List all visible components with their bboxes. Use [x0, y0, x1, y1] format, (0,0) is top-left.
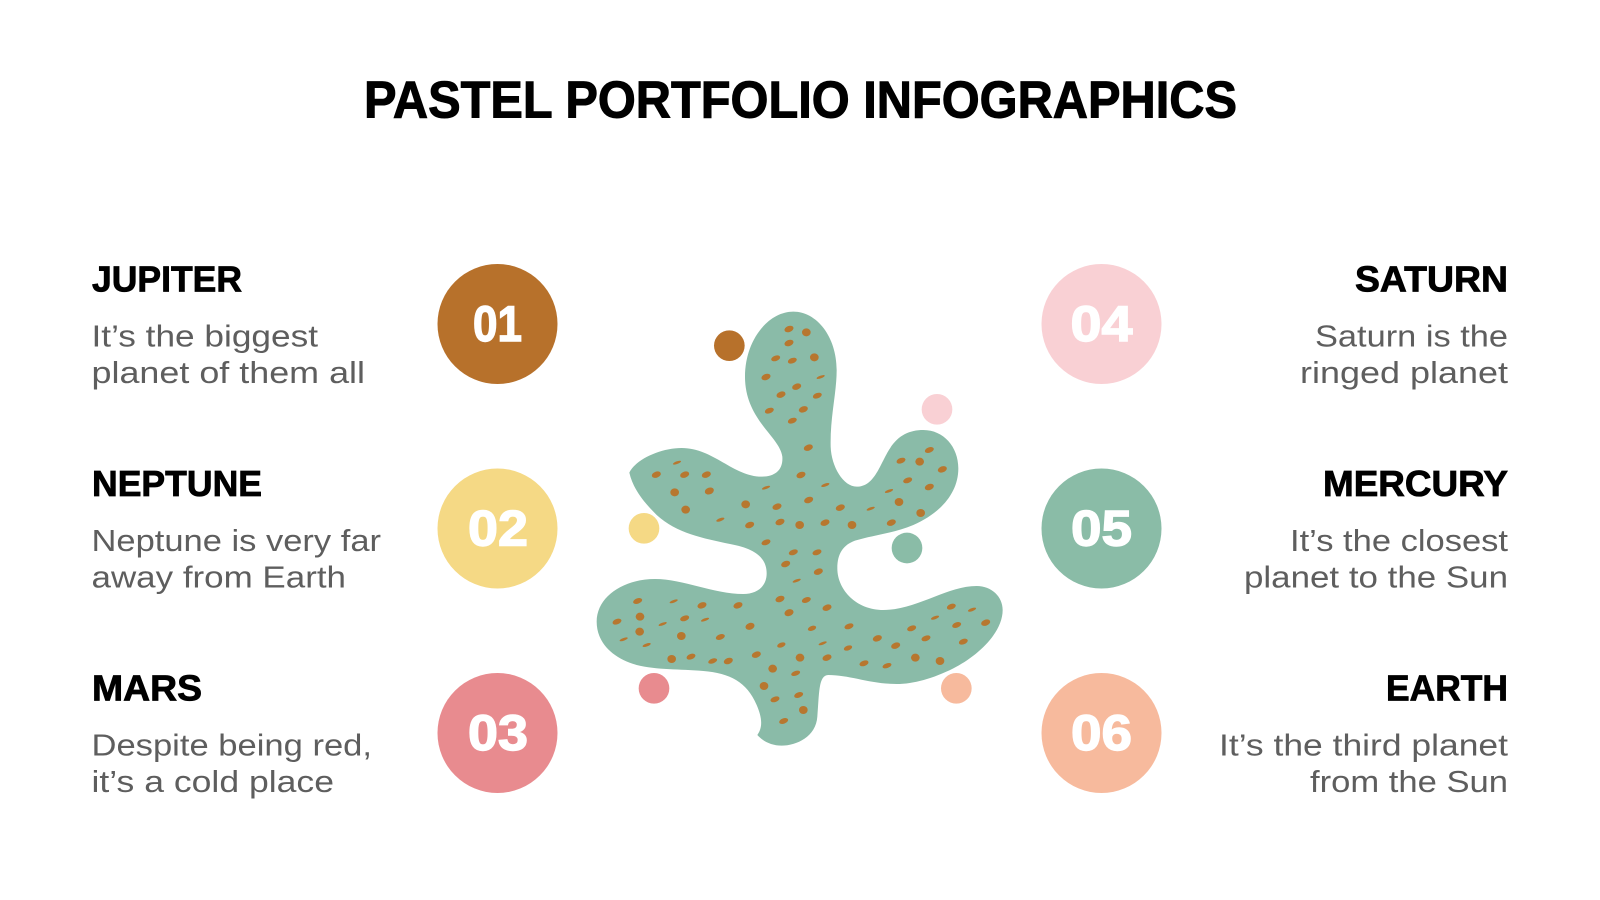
number badge 02: 02 [468, 500, 528, 556]
text: Earth description: from the Sun [1310, 764, 1508, 799]
text: Mars description [92, 728, 372, 799]
text: Mars description: Despite being red, [92, 728, 372, 762]
text: Neptune description [92, 523, 381, 594]
number badge 06: 06 [1071, 705, 1132, 761]
text: Mercury description [1244, 523, 1508, 594]
heading: Mercury: MERCURY [1323, 463, 1508, 504]
text: Saturn description: Saturn is the [1315, 318, 1508, 354]
number badge 05: 05 [1071, 500, 1132, 556]
number badge 04: 04 [1070, 296, 1133, 352]
text: Earth description [1219, 728, 1508, 799]
coral speckles [612, 325, 991, 725]
text: Neptune description: away from Earth [92, 560, 346, 594]
number badge 01 [438, 264, 558, 384]
text: Jupiter description: It’s the biggest [92, 318, 318, 354]
number badge 03 [438, 673, 558, 793]
text: Neptune description: Neptune is very far [92, 523, 381, 558]
accent dots around coral [629, 330, 972, 704]
heading: Saturn: SATURN [1355, 258, 1508, 300]
number badge 02 [438, 468, 558, 588]
text: Earth description: It’s the third planet [1219, 728, 1508, 762]
panel: 03 Mars [92, 668, 558, 799]
number badge 03: 03 [468, 705, 528, 761]
central illustration: coral with dots [597, 312, 1003, 746]
number badge 01: 01 [473, 296, 522, 352]
coral shape [597, 312, 1003, 746]
heading: Jupiter: JUPITER [92, 258, 242, 300]
text: Saturn description [1300, 318, 1508, 390]
text: Saturn description: ringed planet [1300, 355, 1508, 390]
panel: 04 Saturn [1042, 258, 1508, 390]
text: Mars description: it’s a cold place [92, 764, 334, 799]
text: Jupiter description: planet of them all [92, 355, 365, 390]
panel: 02 Neptune [92, 463, 558, 594]
text: Jupiter description [92, 318, 365, 390]
number badge 04 [1042, 264, 1162, 384]
text: Mercury description: It’s the closest [1290, 523, 1508, 558]
panel: 01 Jupiter [92, 258, 558, 390]
title: PASTEL PORTFOLIO INFOGRAPHICS [364, 72, 1237, 130]
heading: Mars: MARS [92, 668, 202, 708]
number badge 05 [1042, 468, 1162, 588]
number badge 06 [1042, 673, 1162, 793]
heading: Neptune: NEPTUNE [92, 463, 262, 504]
text: Mercury description: planet to the Sun [1244, 560, 1508, 594]
panel: 05 Mercury [1042, 463, 1508, 594]
panel: 06 Earth [1042, 668, 1508, 799]
heading: Earth: EARTH [1386, 668, 1508, 708]
